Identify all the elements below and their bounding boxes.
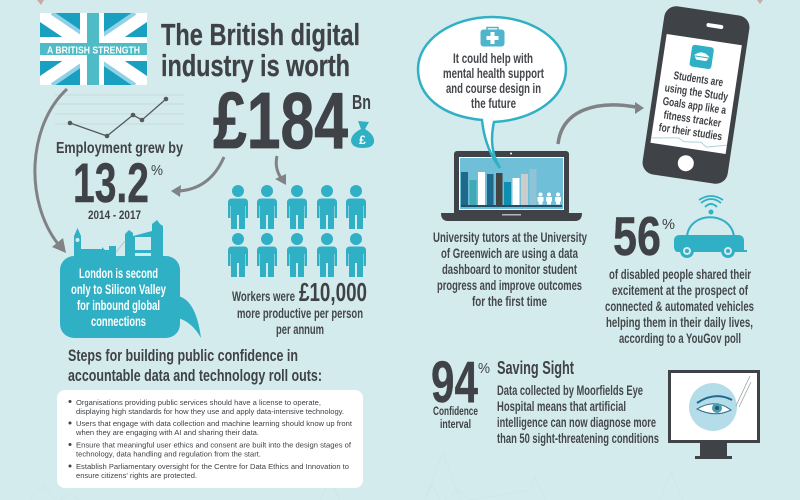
title: industry is worth	[161, 48, 350, 83]
phone: Study Goals app: fitness tracker	[663, 110, 722, 130]
phone: Study Goals app: using the Study	[664, 82, 729, 104]
headline figure: £184 Bn: Bn	[352, 92, 371, 114]
text: saving sight	[497, 358, 659, 446]
heading: steps	[68, 346, 322, 385]
callout: London: London is second	[79, 266, 158, 281]
stat: 94 percent: interval	[440, 417, 471, 431]
speech bubble: mental health: and course design in	[446, 81, 541, 96]
arrow: laptop to phone	[558, 102, 644, 144]
icon: connected car	[674, 196, 747, 258]
stat: worker productivity: Workers were	[232, 289, 295, 304]
text: disabled people: excitement at the prospect of	[612, 283, 748, 298]
speech bubble: mental health	[418, 17, 566, 168]
stat: worker productivity: per annum	[276, 322, 324, 337]
panel: steps list: ensure citizens' rights are protected.	[76, 471, 197, 480]
stat: worker productivity: £10,000	[299, 277, 367, 307]
text: university tutors	[433, 230, 587, 309]
stat: worker productivity	[232, 277, 367, 337]
callout: London	[60, 256, 201, 338]
speech bubble: mental health: mental health support	[443, 66, 544, 81]
speech bubble: mental health: the future	[471, 96, 516, 111]
arrow: flag to London	[35, 89, 67, 253]
text: saving sight: Data collected by Moorfields Eye	[497, 383, 643, 398]
panel: steps list: Users that engage with data collection and machine learning should know up front	[76, 419, 353, 428]
panel: steps list: Organisations providing public services should have a license to operate,	[76, 398, 321, 407]
phone: Study Goals app	[641, 5, 751, 185]
icon: graduation cap	[689, 44, 714, 69]
stat: 94 percent: 94	[431, 350, 478, 415]
icon: money bag	[351, 121, 374, 148]
title	[161, 17, 360, 83]
flag: A British Strength	[40, 13, 147, 85]
icon: money bag: £	[359, 133, 366, 147]
text: disabled people	[605, 267, 754, 346]
speech bubble: mental health: It could help with	[453, 51, 533, 66]
panel: steps list: Ensure that meaningful user ethics and consent are built into the design stages of	[76, 440, 352, 450]
stat: 94 percent: %	[478, 360, 490, 377]
text: university tutors: dashboard to monitor student	[442, 262, 577, 277]
flag: A British Strength: A BRITISH STRENGTH	[47, 46, 140, 56]
panel: steps list	[57, 390, 363, 488]
panel: steps list: Establish Parliamentary oversight for the Centre for Data Ethics and Innovation to	[76, 462, 349, 471]
heading: steps: accountable data and technology roll outs:	[68, 366, 322, 385]
panel: steps list: when they are engaging with AI and sharing their data.	[75, 428, 259, 437]
stat: employment growth	[56, 140, 183, 222]
phone: Study Goals app: Students are	[673, 70, 724, 89]
callout: London: only to Silicon Valley	[71, 282, 166, 297]
text: saving sight: Saving Sight	[497, 358, 574, 378]
text: saving sight: than 50 sight-threatening conditions	[497, 431, 659, 446]
title: The British digital	[161, 17, 360, 52]
phone: Study Goals app: for their studies	[658, 122, 723, 143]
text: university tutors: for the first time	[472, 294, 547, 309]
text: saving sight: Hospital means that artificial	[497, 399, 626, 414]
icon: monitor with eye	[670, 372, 758, 459]
callout: London: connections	[91, 314, 146, 329]
stat: employment growth: 13.2	[73, 151, 149, 214]
stat: 94 percent: Confidence	[433, 404, 478, 418]
icon: London skyline	[74, 220, 163, 258]
icon: workers grid	[228, 185, 366, 277]
stat: employment growth: Employment grew by	[56, 140, 183, 157]
arrow: value to employment	[171, 157, 224, 197]
stat: worker productivity: more productive per person	[237, 306, 363, 321]
arrow: value to workers	[275, 156, 286, 185]
heading: steps: Steps for building public confidence in	[68, 346, 298, 365]
headline figure: £184 Bn: £184	[213, 76, 348, 165]
stat: employment growth: %	[151, 162, 163, 179]
text: university tutors: progress and improve outcomes	[437, 278, 582, 293]
panel: steps list: technology, data handling and regulation from the start.	[76, 450, 261, 458]
callout: London: for inbound global	[77, 298, 160, 313]
stat: 56 percent: %	[662, 216, 675, 233]
text: disabled people: according to a YouGov poll	[619, 331, 741, 346]
text: saving sight: intelligence can now diagnose more	[497, 415, 656, 430]
icon: medical case	[480, 28, 504, 46]
icon: laptop with bar chart	[441, 151, 582, 221]
text: university tutors: University tutors at the University	[433, 230, 587, 245]
phone: Study Goals app: Goals app like a	[662, 96, 727, 117]
text: university tutors: of Greenwich are using a data	[441, 246, 578, 261]
line chart: employment	[55, 95, 184, 138]
stat: employment growth: 2014 - 2017	[88, 208, 141, 222]
panel: steps list: displaying high standards for how they use and apply data-intensive technology.	[76, 407, 344, 416]
stat: 56 percent: 56	[613, 205, 661, 267]
